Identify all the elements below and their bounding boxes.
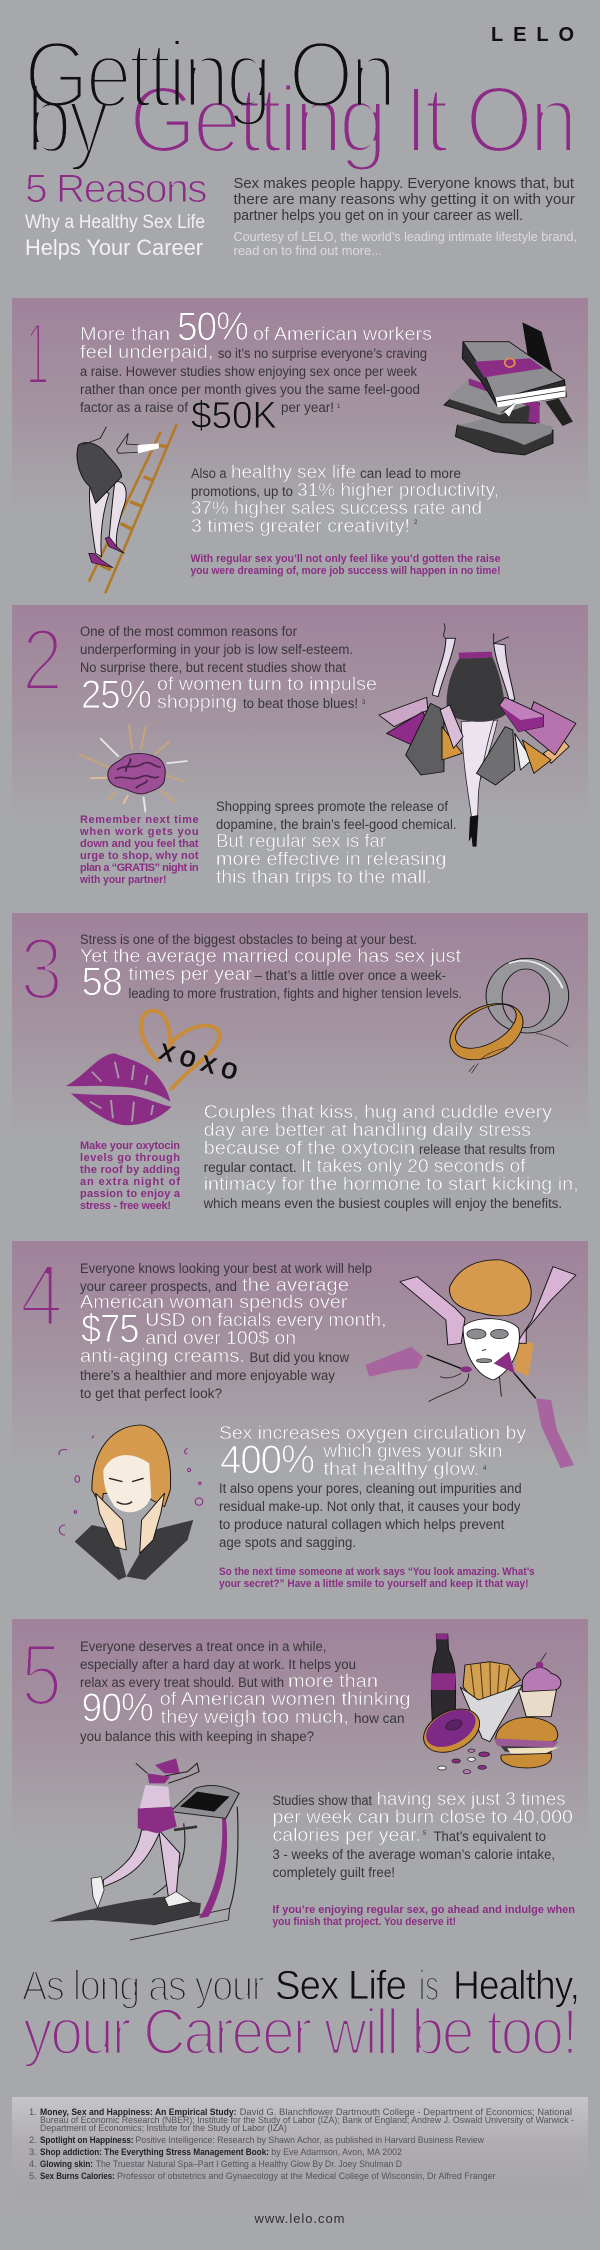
text block: self-esteem: underperforming in your job is low self-esteem.	[80, 642, 353, 657]
callout 2: Remember next time	[80, 814, 199, 826]
callout 2: with your partner!	[79, 874, 166, 886]
reference list: by Eve Adamson, Avon, MA 2002	[271, 2147, 402, 2157]
reference list: Professor of obstetrics and Gynaecology at the Medical College of Wisconsin, Dr Alfred Franger	[117, 2171, 496, 2181]
number 4: 4	[20, 1246, 63, 1345]
panel: reason 2	[12, 605, 588, 887]
text block: underpaid: 50%	[177, 305, 248, 349]
callout 2: when work gets you	[79, 826, 199, 838]
text block: treat: you balance this with keeping in shape?	[80, 1729, 314, 1744]
text block: self-esteem: 25%	[81, 673, 151, 717]
website: www.lelo.com	[254, 2211, 344, 2226]
reference list: Department of Economics; Institute for the Study of Labor (IZA)	[40, 2123, 287, 2133]
callout 3: an extra night of	[80, 1176, 180, 1188]
text block: looking your best: Everyone knows looking your best at work will help	[80, 1261, 372, 1276]
reference list: Positive Intelligence: Research by Shawn Achor, as published in Harvard Business Review	[136, 2135, 484, 2145]
text block: underpaid: 1	[337, 404, 341, 410]
text block: underpaid	[80, 305, 432, 437]
text block: underpaid: of American workers	[253, 324, 432, 344]
panel background 4	[12, 1241, 588, 1466]
callout 3: Make your oxytocin	[80, 1140, 180, 1152]
callout 4	[219, 1566, 535, 1590]
text block: treat: more than	[288, 1671, 378, 1691]
text block: healthy sex life: 37% higher sales success rate and	[191, 498, 482, 518]
text block: calories: having sex just 3 times	[377, 1789, 566, 1809]
title line: Getting On: Getting On	[24, 22, 393, 128]
callout 1: you were dreaming of, more job success will happen in no time!	[190, 565, 500, 577]
reference numbers: 1.	[29, 2107, 37, 2117]
text block: healthy sex life: Also a	[191, 466, 227, 481]
text block: healthy sex life: 31% higher productivity,	[297, 480, 499, 500]
logo: LELO: LELO	[491, 24, 574, 46]
panel background 1	[12, 298, 588, 513]
text block: calories: per week can burn close to 40,000	[272, 1807, 573, 1827]
intro text: read on to find out more...	[234, 244, 382, 258]
number 3: 3	[20, 919, 63, 1018]
callout 2: down and you feel that	[80, 838, 199, 850]
text block: oxytocin: day are better at handling daily stress	[204, 1120, 531, 1140]
text block: self-esteem: 3	[362, 700, 366, 706]
text block: looking your best: to get that perfect look?	[80, 1386, 222, 1401]
text block: underpaid: a raise. However studies show enjoying sex once per week	[80, 364, 417, 379]
text block: healthy sex life: can lead to more	[360, 466, 461, 481]
callout 3: stress - free week!	[80, 1200, 171, 1212]
text block: underpaid: feel underpaid,	[80, 342, 214, 362]
text block: healthy sex life: promotions, up to	[191, 484, 293, 499]
subtitle block	[25, 167, 207, 260]
reference numbers: 3.	[29, 2147, 37, 2157]
text block: calories: Studies show that	[272, 1793, 372, 1808]
subtitle line 2: Why a Healthy Sex Life	[25, 212, 205, 233]
number 5: 5	[21, 1625, 62, 1724]
illustration: smiling woman	[59, 1425, 203, 1580]
panel: reason 1	[12, 298, 588, 593]
text block: oxytocin: release that results from	[419, 1142, 555, 1157]
text block: treat	[80, 1639, 411, 1744]
text block: stress: times per year	[128, 964, 252, 984]
text block: looking your best: $75	[81, 1307, 138, 1351]
reference list	[40, 2107, 574, 2181]
reference list: Shop addiction: The Everything Stress Management Book:	[40, 2147, 269, 2157]
icon: xoxo: xoxo	[156, 1034, 242, 1087]
text block: oxytocin: intimacy for the hormone to start kicking in,	[204, 1174, 579, 1194]
text block: stress: – that’s a little over once a week-	[254, 968, 446, 983]
text block: healthy sex life: 2	[414, 520, 418, 526]
text block: dopamine: Shopping sprees promote the release of	[216, 799, 448, 814]
title	[24, 22, 574, 173]
text block: treat: Everyone deserves a treat once in a while,	[80, 1639, 326, 1654]
callout 3: the roof by adding	[80, 1164, 180, 1176]
illustration: exploding brain	[78, 724, 188, 812]
intro text: there are many reasons why getting it on with your	[234, 191, 575, 208]
callout 3: levels go through	[80, 1152, 180, 1164]
text block: dopamine	[216, 799, 456, 887]
text block: stress	[80, 932, 462, 1004]
text block: healthy sex life	[191, 462, 499, 536]
text block: treat: of American women thinking	[160, 1689, 411, 1709]
title word: by: by	[26, 67, 110, 173]
conclusion heading	[22, 1962, 579, 2068]
text block: stress: 58	[82, 960, 122, 1004]
callout 5: If you’re enjoying regular sex, go ahead and indulge when	[272, 1904, 575, 1916]
text block: calories: calories per year.	[272, 1825, 421, 1845]
text block: treat: relax as every treat should. But with	[80, 1675, 284, 1690]
text block: underpaid: rather than once per month gives you the same feel-good	[80, 382, 420, 397]
text block: oxygen circulation: residual make-up. Not only that, it causes your body	[219, 1499, 521, 1514]
text block: oxytocin: because of the oxytocin	[204, 1138, 415, 1158]
text block: self-esteem: One of the most common reasons for	[80, 624, 297, 639]
panel: reason 5	[12, 1619, 588, 1940]
callout 2: urge to shop, why not	[80, 850, 199, 862]
text block: underpaid: so it’s no surprise everyone’s craving	[218, 346, 427, 361]
subtitle line 3: Helps Your Career	[25, 235, 203, 260]
text block: oxygen circulation: that healthy glow.	[323, 1459, 479, 1479]
callout 3	[80, 1140, 181, 1212]
panel: reason 4	[12, 1241, 588, 1590]
text block: dopamine: But regular sex is far	[216, 831, 386, 851]
intro text: Courtesy of LELO, the world’s leading intimate lifestyle brand,	[234, 230, 577, 244]
text block: looking your best: there’s a healthier and more enjoyable way	[80, 1368, 335, 1383]
panel: reason 3	[12, 913, 588, 1212]
text block: looking your best: the average	[242, 1275, 349, 1295]
text block: oxygen circulation: age spots and sagging.	[219, 1535, 356, 1550]
conclusion heading: Healthy,	[453, 1962, 579, 2008]
intro text	[234, 175, 577, 258]
text block: treat: how can	[354, 1711, 404, 1726]
text block: oxygen circulation	[219, 1423, 526, 1550]
text block: oxytocin: which means even the busiest couples will enjoy the benefits.	[203, 1196, 562, 1211]
illustration: face mask treatment	[365, 1260, 576, 1468]
illustration: wedding rings	[438, 958, 569, 1073]
reference numbers: 5.	[29, 2171, 37, 2181]
icon: stacks of money	[444, 322, 573, 455]
reference numbers: 2.	[29, 2135, 37, 2145]
text block: oxygen circulation: 4	[483, 1466, 487, 1472]
panel background 5	[12, 1619, 588, 1844]
text block: oxytocin: Couples that kiss, hug and cuddle every	[204, 1102, 552, 1122]
text block: looking your best	[80, 1261, 386, 1401]
references background	[12, 2097, 588, 2225]
conclusion heading: Sex Life	[275, 1962, 406, 2008]
text block: looking your best: your career prospects, and	[80, 1279, 237, 1294]
text block: calories: 5	[423, 1831, 427, 1837]
callout 4: So the next time someone at work says “You look amazing. What’s	[219, 1566, 535, 1578]
callout 4: your secret?” Have a little smile to yourself and keep it that way!	[219, 1578, 528, 1590]
callout 5	[272, 1904, 575, 1928]
text block: looking your best: and over 100$ on	[145, 1328, 296, 1348]
text block: stress: Yet the average married couple has sex just	[80, 946, 461, 966]
text block: self-esteem: to beat those blues!	[243, 696, 358, 711]
intro text: partner helps you get on in your career as well.	[234, 207, 523, 224]
text block: dopamine: more effective in releasing	[216, 849, 446, 869]
text block: calories: completely guilt free!	[272, 1865, 395, 1880]
text block: oxygen circulation: 400%	[220, 1438, 314, 1482]
text block: stress: leading to more frustration, fights and higher tension levels.	[128, 986, 462, 1001]
text block: looking your best: anti-aging creams.	[80, 1346, 245, 1366]
text block: oxygen circulation: to produce natural collagen which helps prevent	[219, 1517, 505, 1532]
conclusion heading: is	[419, 1962, 439, 2010]
text block: self-esteem: shopping	[157, 692, 237, 712]
callout 1	[190, 553, 500, 577]
icon: lips	[66, 1053, 171, 1125]
text block: dopamine: this than trips to the mall.	[216, 867, 432, 887]
text block: oxygen circulation: Sex increases oxygen circulation by	[219, 1423, 526, 1443]
text block: oxytocin: regular contact.	[204, 1160, 297, 1175]
icon: heart	[141, 1011, 219, 1090]
illustration: woman with shopping bags	[379, 623, 576, 847]
subtitle: 5 Reasons: 5 Reasons	[25, 167, 207, 211]
reference list: The Truestar Natural Spa–Part I Getting a Healthy Glow By Dr. Joey Shulman D	[96, 2159, 402, 2169]
text block: calories	[272, 1789, 573, 1880]
callout 1: With regular sex you’ll not only feel like you’d gotten the raise	[190, 553, 500, 565]
illustration: woman on treadmill	[49, 1758, 239, 1940]
text block: treat: they weigh too much,	[161, 1707, 349, 1727]
text block: healthy sex life: 3 times greater creativity!	[191, 516, 410, 536]
text block: treat: especially after a hard day at work. It helps you	[80, 1657, 356, 1672]
reference list: Glowing skin:	[40, 2159, 93, 2169]
text block: oxytocin	[203, 1102, 579, 1211]
illustration: woman climbing ladder	[77, 424, 177, 593]
text block: treat: 90%	[82, 1686, 153, 1730]
text block: underpaid: More than	[80, 324, 170, 344]
conclusion heading: As long as your	[22, 1962, 264, 2010]
panel background 3	[12, 913, 588, 1138]
callout 2	[79, 814, 199, 886]
callout 5: you finish that project. You deserve it!	[272, 1916, 456, 1928]
text block: oxygen circulation: which gives your skin	[322, 1441, 502, 1461]
reference list: David G. Blanchflower Dartmouth College - Department of Economics; National	[240, 2107, 572, 2117]
references panel	[12, 2097, 588, 2226]
reference numbers: 4.	[29, 2159, 37, 2169]
text block: oxygen circulation: It also opens your pores, cleaning out impurities and	[219, 1481, 522, 1496]
text block: looking your best: USD on facials every month,	[145, 1310, 386, 1330]
text block: oxytocin: It takes only 20 seconds of	[301, 1156, 527, 1176]
text block: calories: 3 - weeks of the average woman’s calorie intake,	[272, 1847, 555, 1862]
callout 3: passion to enjoy a	[80, 1188, 181, 1200]
panel background 2	[12, 605, 588, 820]
text block: underpaid: per year!	[281, 400, 334, 415]
text block: underpaid: factor as a raise of	[80, 400, 188, 415]
text block: self-esteem: of women turn to impulse	[157, 674, 377, 694]
number 2: 2	[22, 610, 63, 709]
text block: healthy sex life: healthy sex life	[231, 462, 356, 482]
text block: stress: Stress is one of the biggest obstacles to being at your best.	[80, 932, 417, 947]
text block: underpaid: $50K	[191, 395, 277, 437]
text block: looking your best: American woman spends over	[80, 1292, 348, 1312]
text block: looking your best: But did you know	[250, 1350, 349, 1365]
illustration: junk food	[414, 1634, 561, 1774]
text block: self-esteem: No surprise there, but recent studies show that	[80, 660, 346, 675]
reference numbers	[29, 2107, 37, 2181]
panel: reason 1: 1	[26, 304, 49, 403]
text block: calories: That’s equivalent to	[434, 1829, 546, 1844]
text block: self-esteem	[80, 624, 377, 717]
callout 2: plan a “GRATIS” night in	[80, 862, 199, 874]
reference list: Money, Sex and Happiness: An Empirical Study:	[40, 2107, 236, 2117]
intro text: Sex makes people happy. Everyone knows that, but	[234, 175, 575, 192]
reference list: Bureau of Economic Research (NBER); Institute for the Study of Labor (IZA); Bank of England; Andrew J. Oswald University of Warwick -	[40, 2115, 574, 2125]
reference list: Spotlight on Happiness:	[40, 2135, 134, 2145]
reference list: Sex Burns Calories:	[40, 2171, 115, 2181]
text block: dopamine: dopamine, the brain’s feel-good chemical.	[216, 817, 456, 832]
